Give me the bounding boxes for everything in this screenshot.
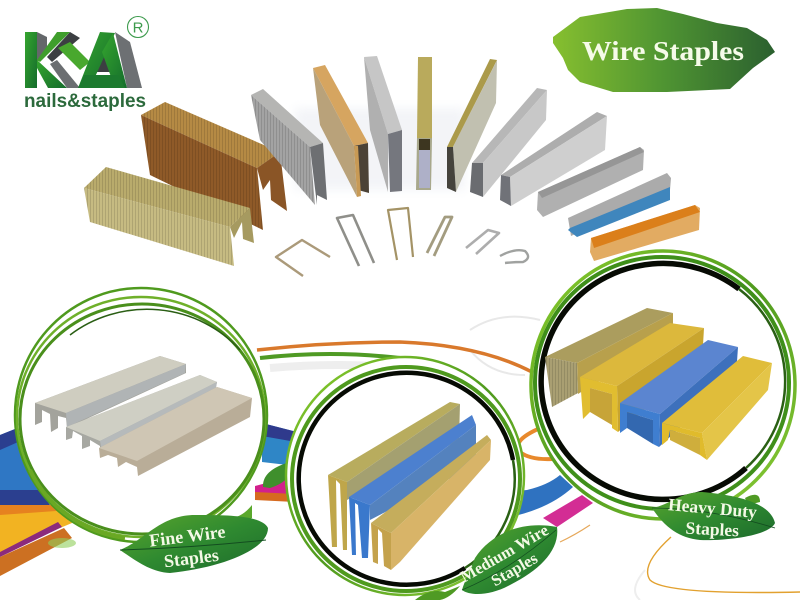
staple: orange — [590, 205, 700, 261]
strip 3 — [99, 387, 252, 476]
small staples — [276, 208, 528, 276]
leaf label: Fine Wire Staples: Fine Wire — [148, 521, 226, 551]
staple: silver angled — [470, 88, 547, 197]
staple: silver narrow — [500, 112, 607, 206]
faint leaf shadow bottom-left — [48, 538, 76, 548]
staple: gold vertical — [416, 57, 432, 190]
staple: copper large — [141, 102, 287, 230]
leaf label: Fine Wire Staples — [120, 515, 268, 573]
staple: silver with blue tips — [568, 173, 671, 237]
orange loop — [518, 426, 552, 459]
orange swoosh — [257, 342, 532, 372]
small leaves under medium ring — [415, 586, 460, 600]
row of staple strips — [84, 56, 700, 276]
strip blue — [620, 340, 738, 447]
left rainbow ribbon — [0, 423, 72, 576]
strip yellow front — [662, 356, 772, 460]
title badge: Wire Staples: Wire Staples — [582, 36, 744, 66]
green swoosh — [260, 354, 507, 420]
small leaf between rings — [263, 462, 291, 488]
ring: heavy duty staples — [531, 251, 795, 519]
magenta ribbon — [543, 495, 593, 527]
strip olive gold — [328, 402, 460, 550]
leaf label: Heavy Duty Staples: Heavy Duty — [667, 494, 758, 522]
medium staple strips — [328, 402, 491, 570]
background swirl lines — [257, 317, 800, 600]
leaf label: Heavy Duty Staples — [652, 492, 775, 540]
ring: medium wire staples — [286, 357, 524, 595]
strip tan gold — [371, 435, 491, 570]
title badge: Wire Staples — [553, 8, 775, 92]
middle rainbow ribbon — [255, 423, 297, 502]
strip yellow — [580, 323, 704, 432]
leaf label: Medium Wire Staples: Staples — [488, 548, 541, 590]
heavy duty staple strips — [545, 308, 772, 460]
staple: gold and silver — [447, 59, 497, 192]
staple: brass large — [84, 167, 254, 266]
leaf label: Medium Wire Staples: Medium Wire — [457, 520, 552, 586]
orange thin curve — [648, 537, 800, 592]
logo wordmark: nails&staples — [24, 91, 146, 112]
logo: KYA nails and staples — [24, 16, 148, 112]
strip 2 — [66, 375, 217, 456]
small leaf behind heavy label — [745, 495, 760, 505]
small leaf under fine ring — [225, 505, 252, 522]
staple: tall silver — [364, 56, 402, 192]
staple: gold wood tone — [313, 65, 369, 197]
strip blue — [349, 415, 476, 558]
blue ribbon right of medium ring — [505, 475, 573, 518]
registered mark: R — [133, 20, 144, 36]
staple: silver cable — [537, 147, 644, 217]
strip olive — [545, 308, 673, 407]
leaf label: Fine Wire Staples: Staples — [163, 545, 220, 571]
ring: fine wire staples — [15, 288, 267, 542]
strip 1 — [35, 356, 186, 432]
fine wire staple strips — [35, 356, 252, 476]
leaf label: Heavy Duty Staples: Staples — [685, 518, 740, 540]
faint backdrop behind staples — [295, 108, 465, 190]
staple: silver — [251, 89, 327, 205]
